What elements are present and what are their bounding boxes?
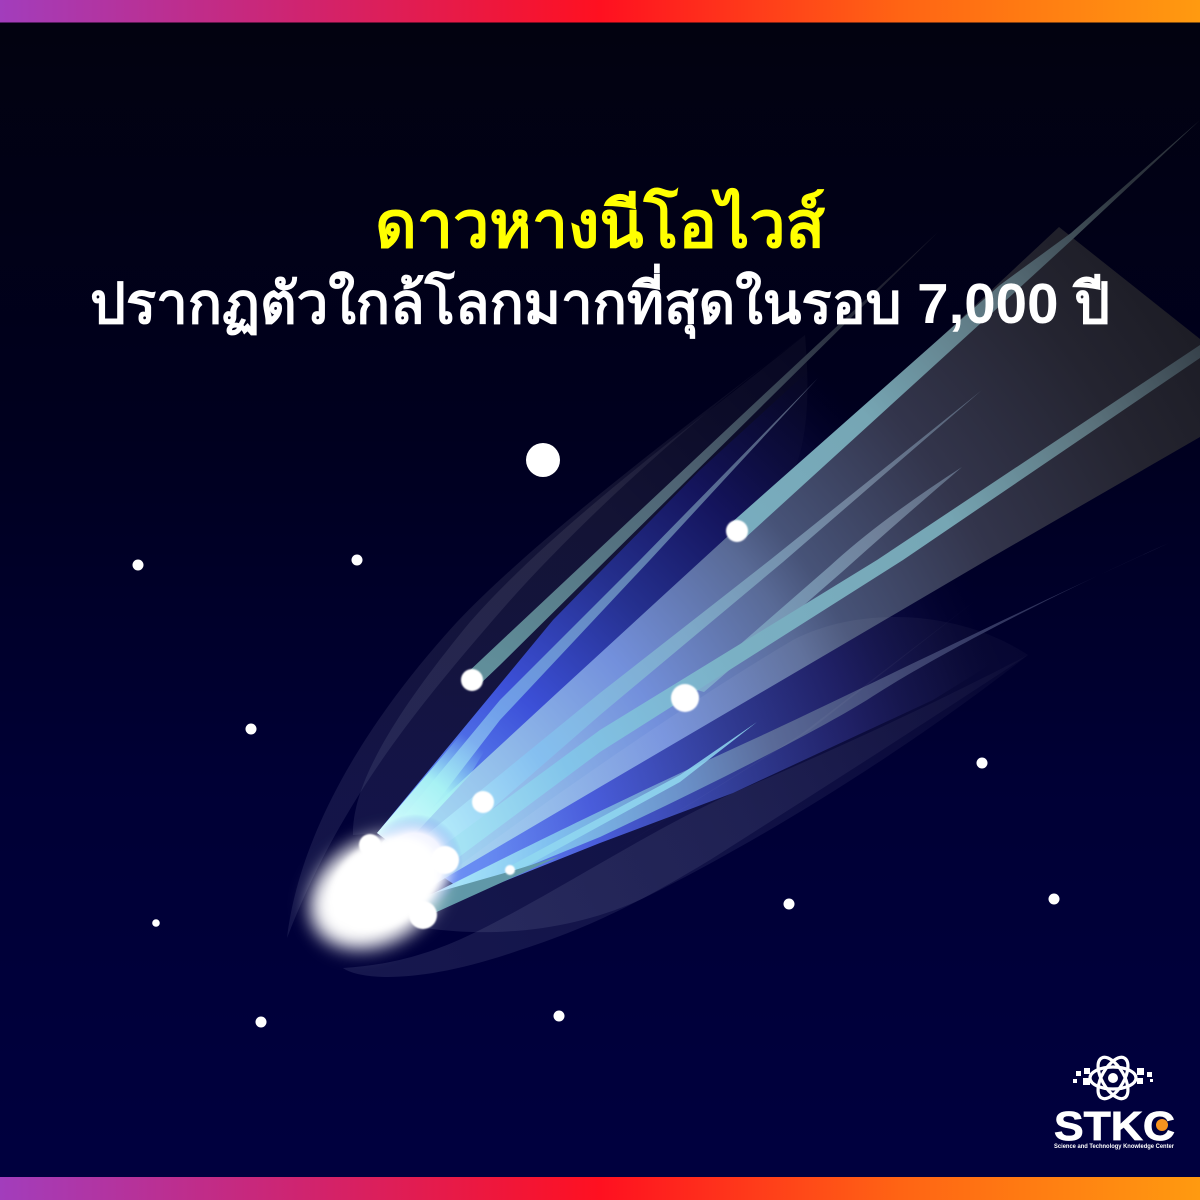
ray: thin lower — [600, 597, 980, 860]
comet tail — [287, 120, 1200, 977]
icon: orange dot — [1156, 1119, 1168, 1131]
logo wordmark: STKC — [1054, 1103, 1175, 1149]
comet head — [289, 812, 463, 972]
head blob — [431, 846, 459, 874]
debris stars — [461, 520, 748, 875]
head bright core — [315, 820, 453, 948]
ray: upper teal from star — [730, 120, 1200, 538]
head blob — [359, 834, 381, 856]
swoosh: outer left — [287, 335, 805, 938]
ray: narrow from large star — [690, 467, 962, 692]
ray: main teal — [440, 345, 1200, 860]
cyan wedge near head — [377, 700, 515, 850]
background stars — [132, 443, 1060, 1028]
ray: broad through star — [420, 390, 982, 850]
logo tagline: Science and Technology Knowledge Center — [1054, 1144, 1175, 1150]
head blob — [409, 901, 437, 929]
ray: left teal from star — [466, 232, 938, 686]
swoosh: inner left — [353, 335, 807, 835]
top gradient bar — [0, 0, 1200, 22]
head halo — [367, 814, 463, 910]
bottom gradient bar — [0, 1177, 1200, 1200]
ray: upper thin through blue — [380, 378, 818, 850]
blue core of tail — [377, 365, 1030, 895]
grey light fan — [400, 227, 1200, 887]
ray: small star — [510, 722, 757, 873]
subtitle: ปรากฏตัวใกล้โลกมากที่สุดในรอบ 7,000 ปี — [90, 263, 1110, 340]
icon: atom — [1090, 1053, 1136, 1103]
swoosh: lower dome — [425, 617, 1028, 932]
ray: teal near head — [410, 856, 560, 915]
title: ดาวหางนีโอไวส์ — [375, 186, 825, 261]
logo: STKC — [1054, 1053, 1175, 1150]
ray: lower wide — [430, 543, 1169, 895]
swoosh: lower band — [343, 655, 1028, 977]
icon: pixel squares — [1073, 1068, 1153, 1085]
head core — [289, 812, 463, 972]
